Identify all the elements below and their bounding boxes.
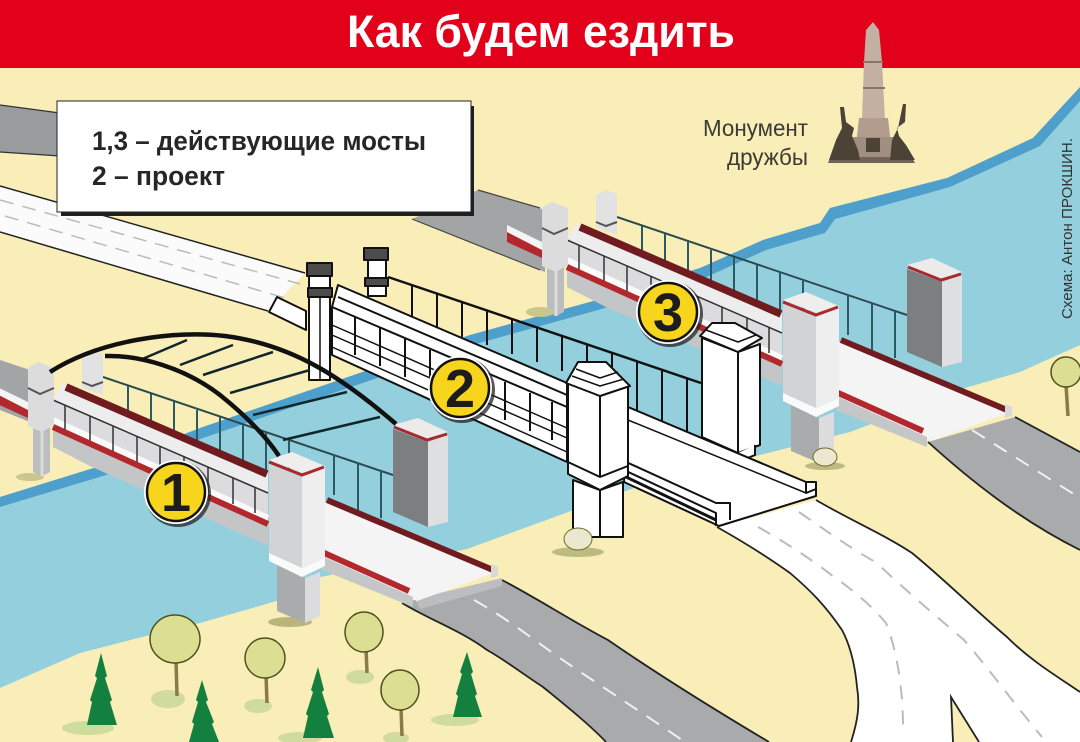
conifer trees bbox=[62, 652, 482, 742]
road: grey right road from bridge 3 bbox=[928, 417, 1080, 550]
marker 2: 2 bbox=[445, 359, 475, 419]
ramp bbox=[624, 407, 816, 526]
credit: Схема: Антон ПРОКШИН. bbox=[1059, 138, 1076, 319]
near tower bbox=[566, 362, 630, 537]
inner arch bbox=[105, 356, 279, 456]
marker 3: 3 bbox=[653, 283, 683, 343]
rocks bbox=[16, 307, 845, 627]
arch beams bbox=[140, 340, 380, 440]
road: grey lower road from bridge 1 bbox=[402, 578, 769, 742]
monument label bbox=[703, 115, 808, 170]
outer arch bbox=[50, 334, 396, 424]
road: white upper-left road to bridge 2 bbox=[0, 186, 305, 311]
left near tower bbox=[307, 263, 332, 380]
title: Как будем ездить bbox=[347, 6, 735, 57]
icon: friendship monument bbox=[828, 22, 915, 163]
left far tower bbox=[364, 248, 388, 296]
legend text: 2 – проект bbox=[92, 161, 225, 191]
legend text: 1,3 – действующие мосты bbox=[92, 126, 426, 156]
far railing bbox=[388, 277, 701, 436]
far right tower bbox=[700, 323, 762, 462]
bridge 2 (project) bbox=[269, 248, 816, 537]
road: white road from bridge 2 with fork bbox=[717, 500, 1080, 742]
monument label: Монумент bbox=[703, 115, 808, 141]
marker 1: 1 bbox=[161, 463, 191, 523]
round trees bbox=[150, 357, 1080, 742]
left end ledge bbox=[269, 297, 306, 330]
road: grey left of bridge 1 bbox=[0, 360, 30, 422]
header band bbox=[0, 0, 1080, 68]
legend text bbox=[92, 126, 426, 191]
road: grey behind bridge 3 bbox=[412, 190, 545, 272]
deck and near railing panel bbox=[332, 285, 567, 462]
road: top-left grey bbox=[0, 105, 60, 156]
legend box bbox=[57, 101, 474, 216]
marker 2 bbox=[428, 356, 495, 423]
bridge 3 bbox=[507, 190, 1012, 463]
marker 1 bbox=[144, 460, 211, 527]
marker 3 bbox=[636, 280, 703, 347]
monument label: дружбы bbox=[727, 144, 808, 170]
bridge 1 with arch bbox=[0, 334, 498, 623]
